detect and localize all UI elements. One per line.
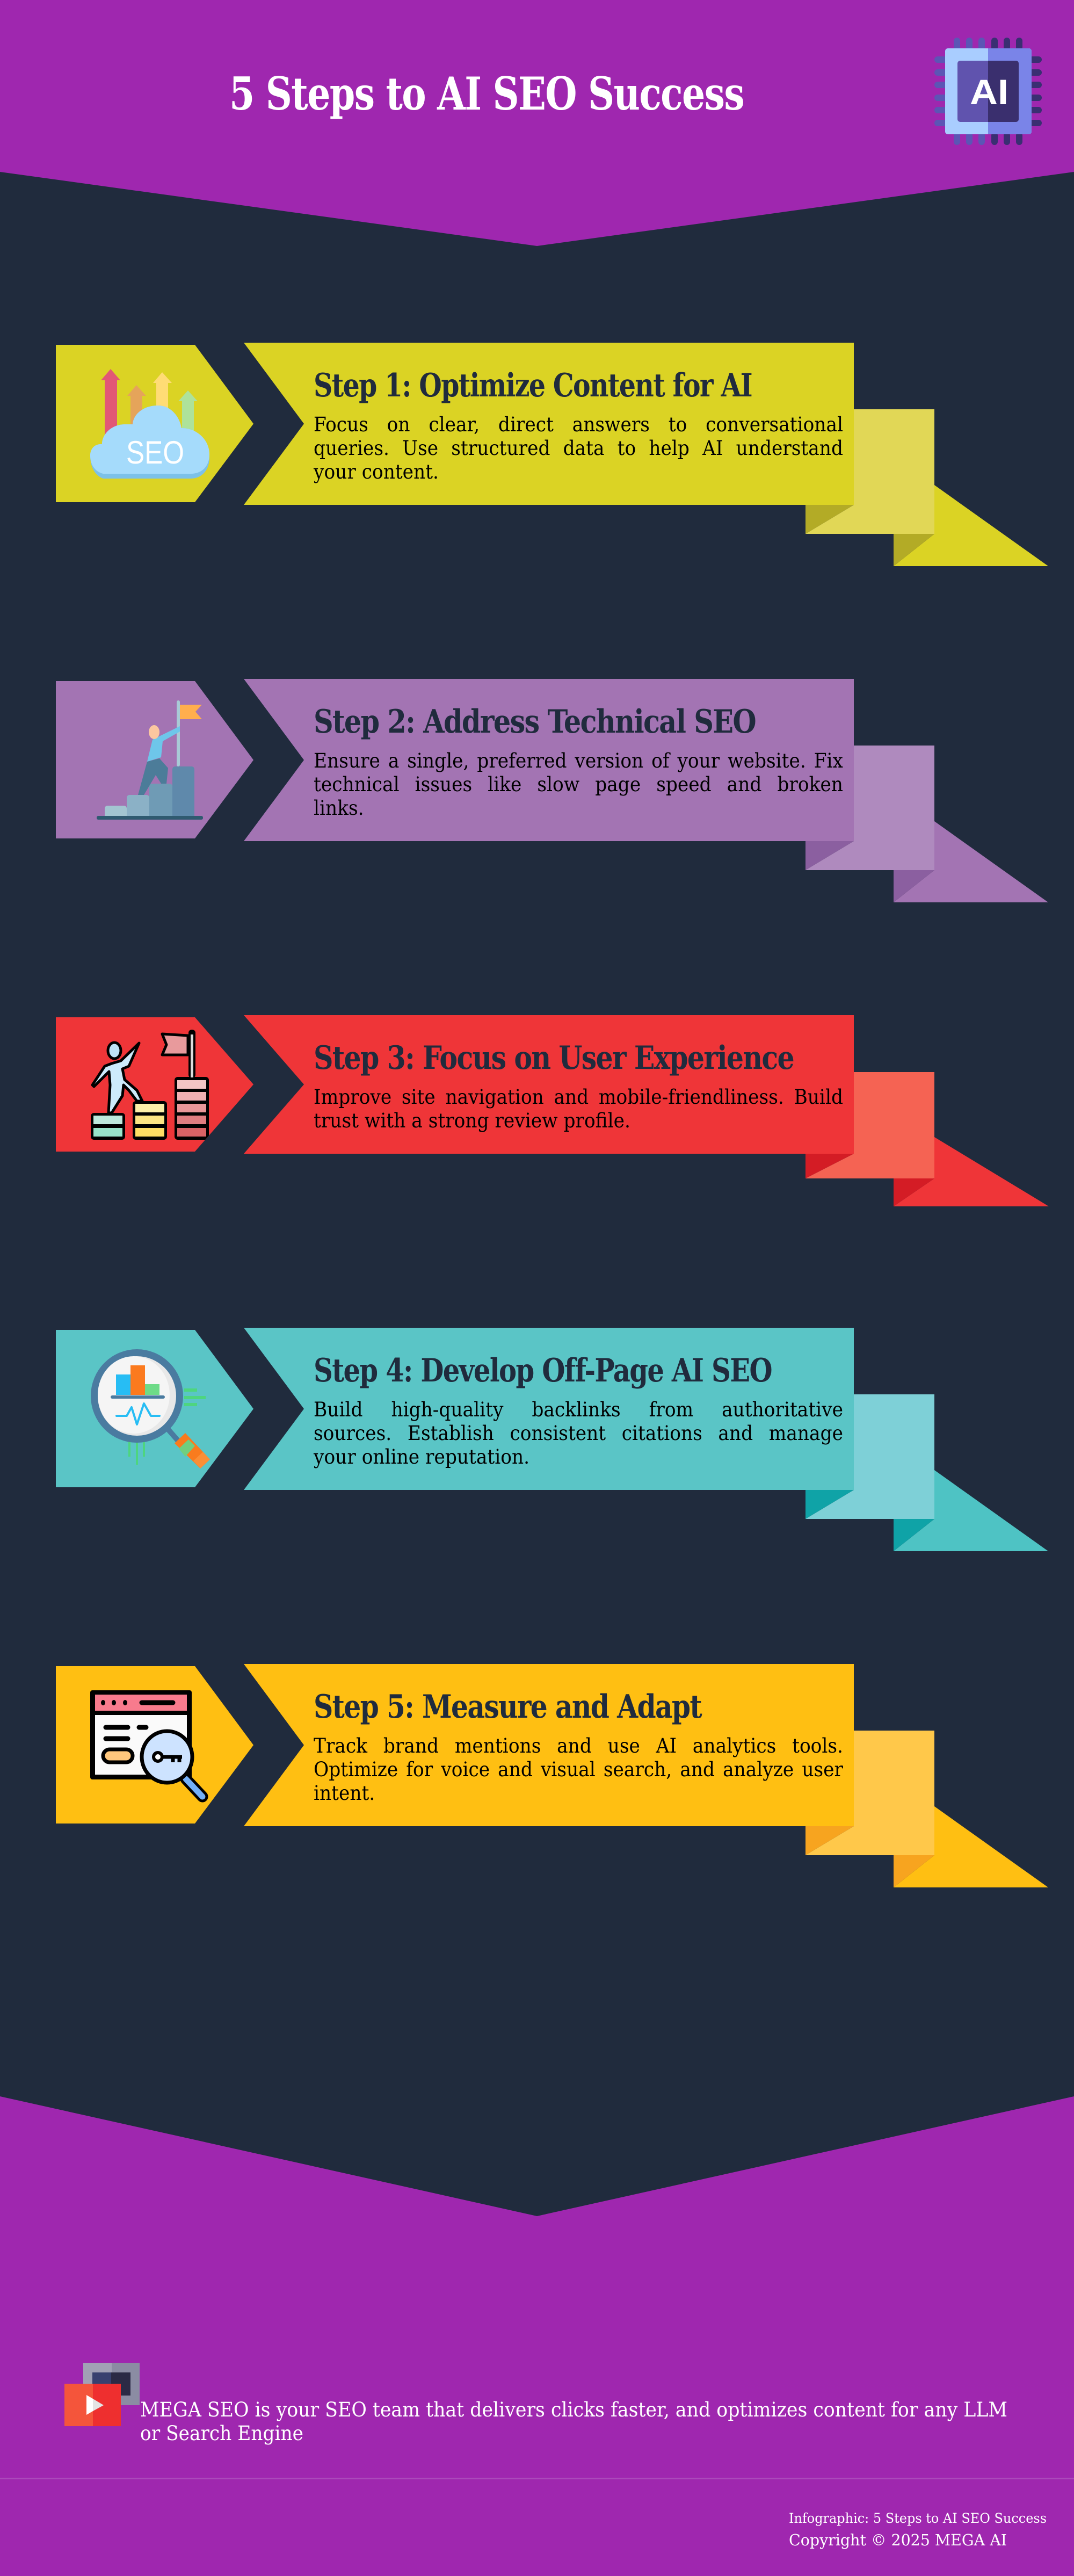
ribbon tail: step 1 (894, 485, 1048, 566)
promo text: MEGA SEO is your SEO team that delivers clicks faster, and optimizes content for any LLM (140, 2398, 1007, 2421)
step 4 (56, 1328, 1048, 1551)
body text: step 2: links. (314, 797, 364, 820)
banner: step 2 (244, 679, 854, 841)
body text: step 2: Ensure a single, preferred version of your website. Fix (314, 749, 843, 772)
step 3 (56, 1015, 1049, 1206)
step 1 (56, 343, 1048, 566)
heading: step 4: Step 4: Develop Off-Page AI SEO (314, 1352, 772, 1390)
ribbon fold: step 2 (806, 746, 934, 870)
heading: step 1: Step 1: Optimize Content for AI (314, 367, 752, 404)
body text: step 1: queries. Use structured data to help AI understand (314, 437, 843, 460)
banner: step 5 (244, 1664, 854, 1826)
icon: magnifier over chart (91, 1349, 210, 1468)
body text: step 5 (314, 1734, 843, 1805)
heading: step 3: Step 3: Focus on User Experience (314, 1039, 794, 1077)
icon panel: step 5 (56, 1666, 253, 1824)
icon: video play layers (64, 2363, 140, 2426)
body text: step 2: technical issues like slow page speed and broken (314, 773, 843, 796)
body text: step 5: Track brand mentions and use AI analytics tools. (314, 1734, 843, 1757)
infographic credit: Infographic: 5 Steps to AI SEO Success (789, 2510, 1047, 2526)
body text: step 1 (314, 413, 843, 483)
icon panel: step 3 (56, 1017, 253, 1152)
icon: climber planting flag (97, 700, 203, 820)
ribbon tail: step 2 (894, 821, 1048, 902)
ribbon fold: step 5 (806, 1731, 934, 1855)
footer divider (0, 2478, 1074, 2479)
icon: browser window with key magnifier (90, 1690, 202, 1797)
icon: AI chip (934, 38, 1042, 145)
banner: step 1 (244, 343, 854, 505)
ribbon fold: step 3 (806, 1072, 934, 1178)
ribbon tail: step 5 (894, 1806, 1048, 1887)
heading: step 5: Step 5: Measure and Adapt (314, 1688, 702, 1726)
body text: step 1: Focus on clear, direct answers to conversational (314, 413, 843, 436)
body text: step 5: intent. (314, 1782, 375, 1805)
ribbon tail: step 3 (894, 1137, 1049, 1206)
icon panel: step 1 (56, 345, 253, 502)
body text: step 1: your content. (314, 460, 439, 483)
body text: step 2 (314, 749, 843, 820)
ribbon fold: step 1 (806, 409, 934, 534)
body text: step 4 (314, 1398, 843, 1468)
body text: step 3: Improve site navigation and mobile-friendliness. Build (314, 1086, 843, 1109)
heading: step 2: Step 2: Address Technical SEO (314, 703, 756, 741)
icon: SEO cloud with arrows (90, 369, 209, 479)
body text: step 4: Build high-quality backlinks from authoritative (314, 1398, 843, 1421)
promo text: or Search Engine (140, 2422, 303, 2445)
footer band (0, 2096, 1074, 2576)
icon: figure climbing stacked blocks to flag (91, 1030, 209, 1140)
banner: step 4 (244, 1328, 854, 1490)
title: 5 Steps to AI SEO Success (229, 67, 744, 120)
body text: step 4: your online reputation. (314, 1445, 529, 1468)
icon panel: step 4 (56, 1330, 253, 1487)
body text: step 5: Optimize for voice and visual search, and analyze user (314, 1758, 843, 1781)
header band (0, 0, 1074, 246)
body text: step 4: sources. Establish consistent citations and manage (314, 1422, 843, 1445)
banner: step 3 (244, 1015, 854, 1154)
icon: AI chip: AI (970, 72, 1008, 112)
step 2 (56, 679, 1048, 902)
ribbon tail: step 4 (894, 1470, 1048, 1551)
ribbon fold: step 4 (806, 1394, 934, 1519)
body text: step 3: trust with a strong review profile. (314, 1109, 630, 1132)
icon: SEO cloud with arrows: SEO (126, 435, 184, 471)
copyright: Copyright © 2025 MEGA AI (789, 2531, 1007, 2549)
icon panel: step 2 (56, 681, 253, 838)
step 5 (56, 1664, 1048, 1887)
body text: step 3 (314, 1086, 843, 1132)
